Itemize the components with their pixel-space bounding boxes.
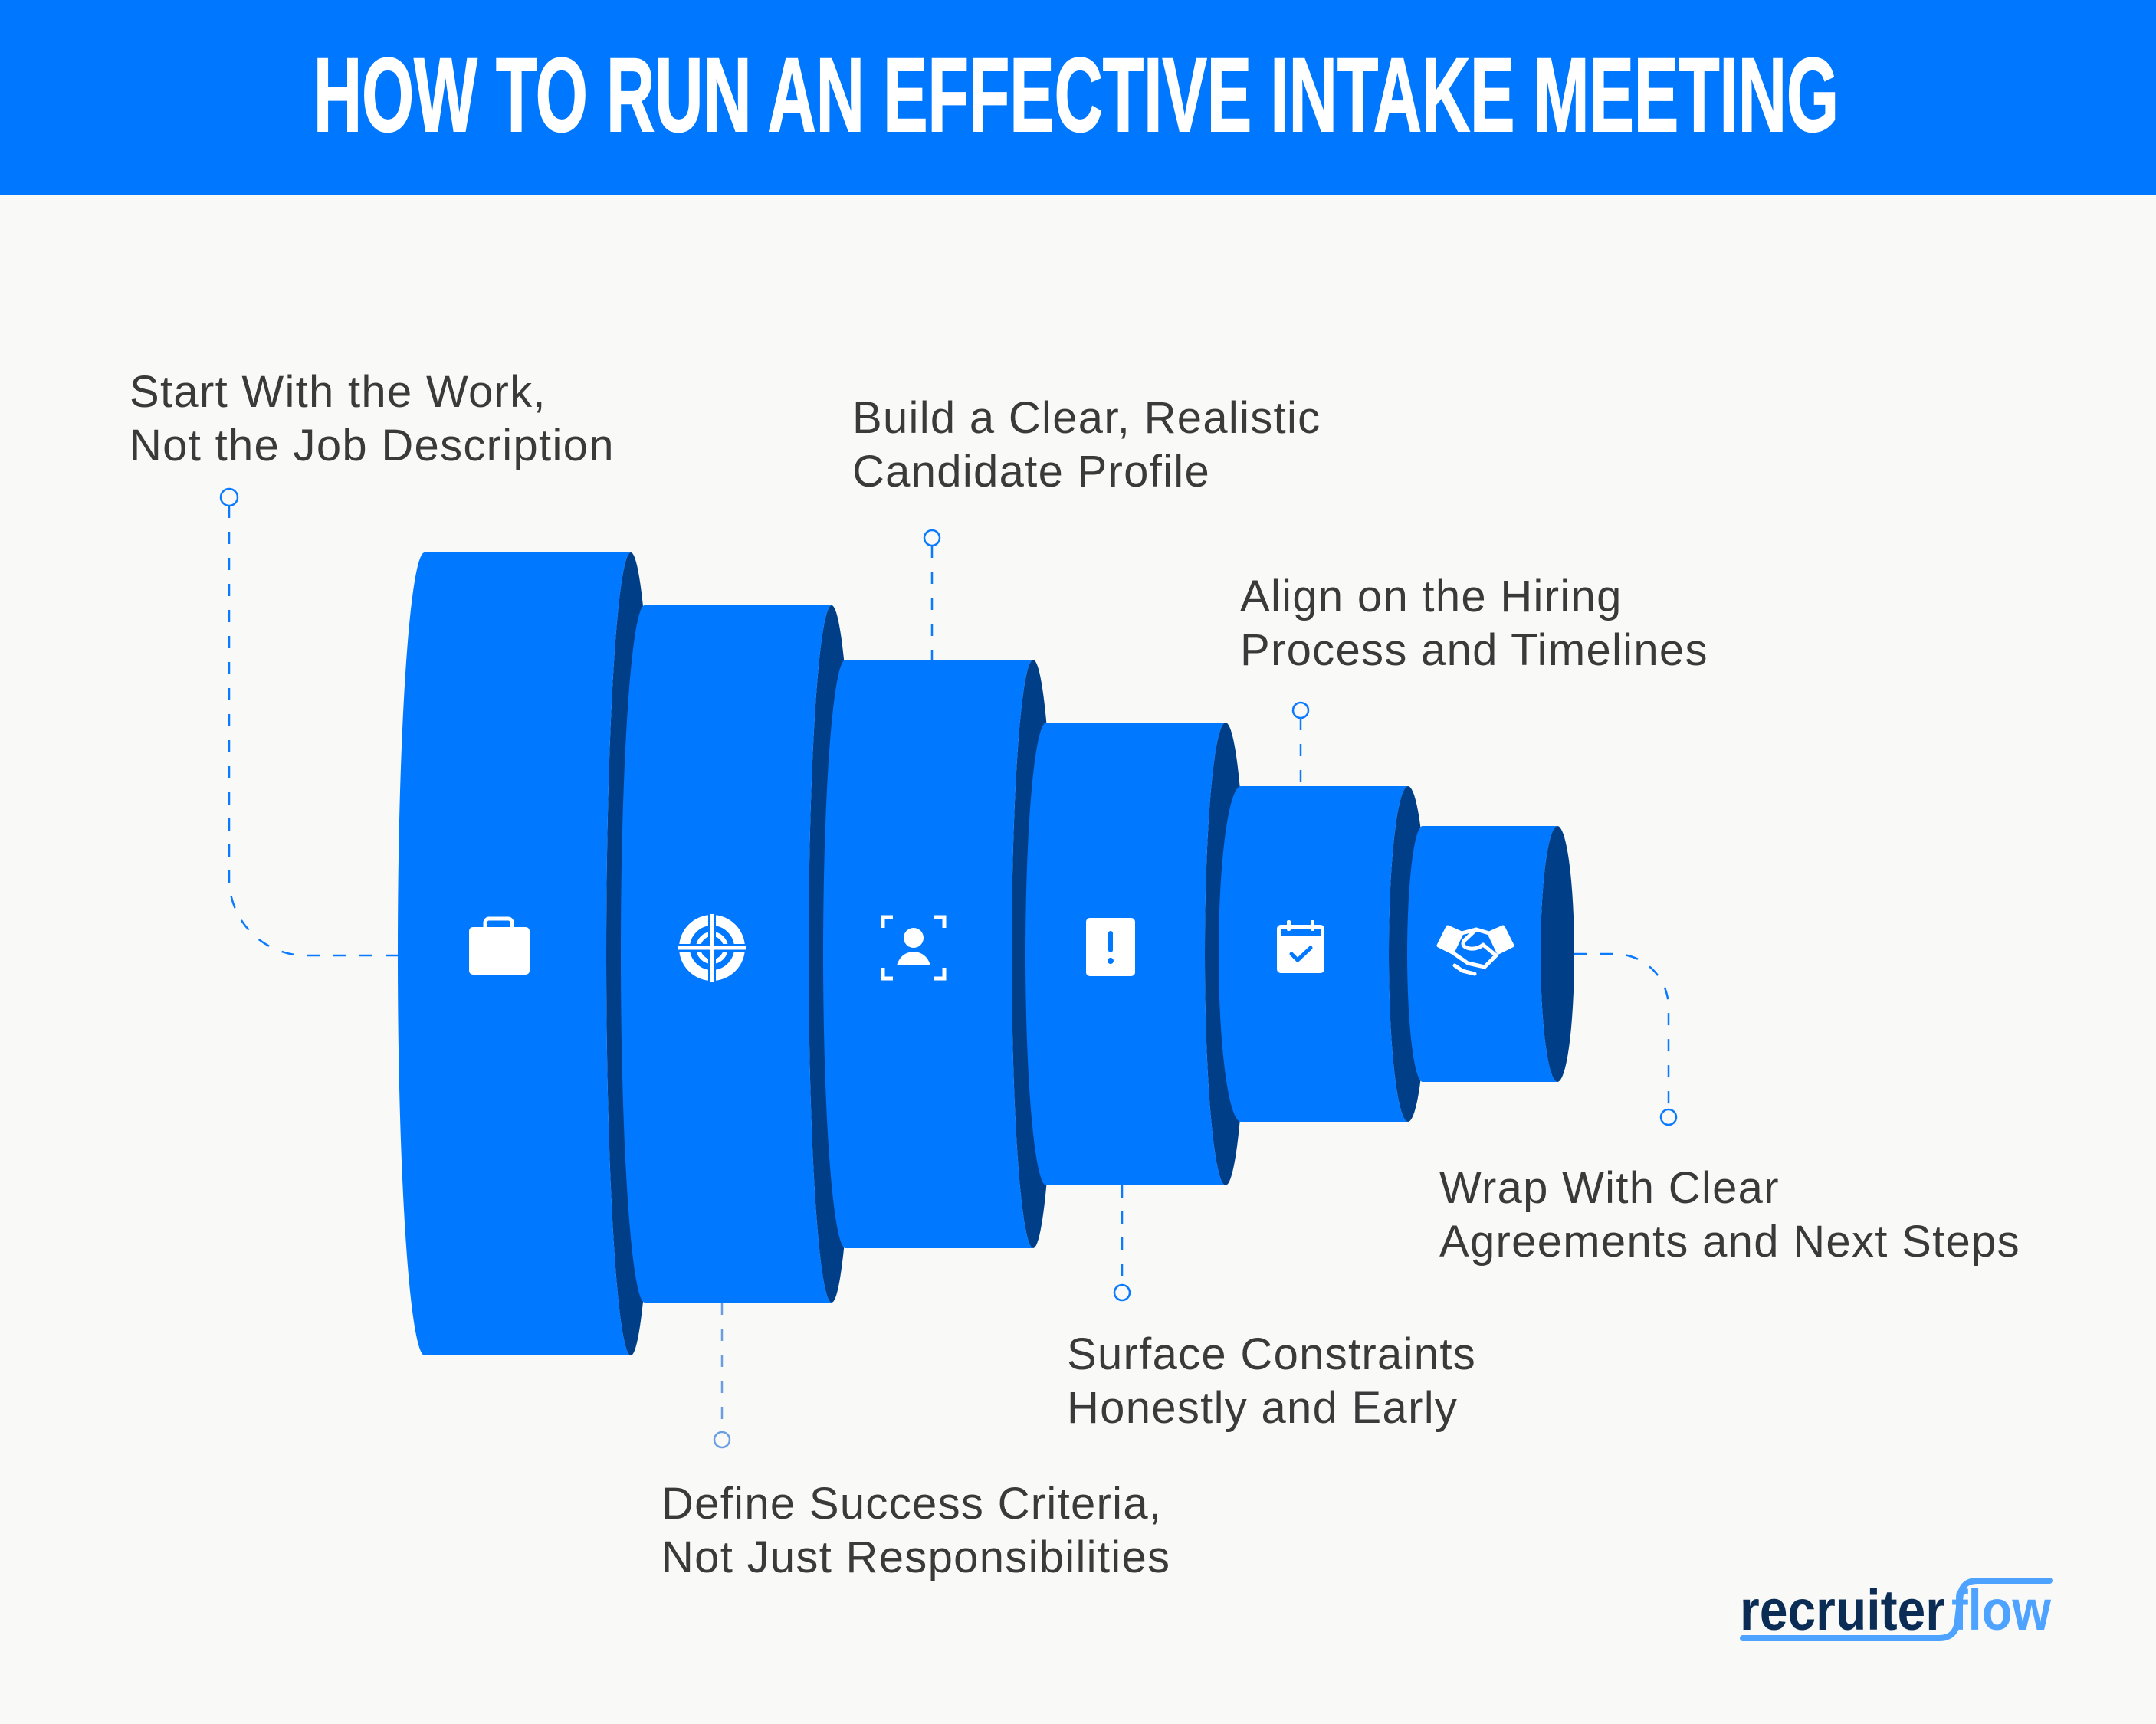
logo: recruiterflow: recruiter	[1740, 1578, 1945, 1642]
label: surface constraints	[1067, 1329, 1476, 1433]
label: define success criteria	[661, 1479, 1170, 1582]
connector: define success	[714, 1303, 730, 1447]
label: build candidate profile	[852, 393, 1321, 497]
cylinder 1	[398, 552, 655, 1355]
label: wrap with agreements	[1439, 1163, 2020, 1267]
label: start with the work	[130, 367, 615, 470]
cylinder 6	[1407, 826, 1574, 1082]
cylinder 5	[1219, 786, 1427, 1122]
connector: build profile	[924, 530, 940, 660]
icon: handshake	[1439, 927, 1512, 974]
connector: start with the work	[221, 489, 399, 955]
cylinder 2	[621, 605, 855, 1303]
label: align on hiring process	[1240, 572, 1708, 675]
icon: briefcase	[469, 919, 530, 975]
label: build candidate profile: Candidate Profile	[852, 447, 1210, 497]
label: align on hiring process: Process and Timelines	[1240, 625, 1708, 675]
label: build candidate profile: Build a Clear, Realistic	[852, 393, 1321, 443]
icon: target	[678, 914, 746, 982]
label: define success criteria: Not Just Responsibilities	[661, 1532, 1170, 1582]
logo: recruiterflow: flow	[1951, 1578, 2051, 1642]
label: define success criteria: Define Success Criteria,	[661, 1479, 1162, 1529]
label: surface constraints: Surface Constraints	[1067, 1329, 1476, 1379]
cylinder 4	[1025, 723, 1246, 1185]
icon: alert	[1086, 918, 1135, 976]
cylinder 3	[823, 660, 1055, 1248]
label: wrap with agreements: Wrap With Clear	[1439, 1163, 1780, 1213]
label: align on hiring process: Align on the Hiring	[1240, 572, 1623, 621]
label: wrap with agreements: Agreements and Next Steps	[1439, 1217, 2020, 1267]
icon: calendar	[1277, 920, 1324, 973]
header banner	[0, 0, 2156, 195]
label: start with the work: Start With the Work,	[130, 367, 546, 417]
label: surface constraints: Honestly and Early	[1067, 1383, 1458, 1433]
connector: surface constraints	[1114, 1185, 1130, 1300]
label: start with the work: Not the Job Description	[130, 421, 615, 470]
icon: person focus	[883, 917, 944, 978]
connector: align on process	[1293, 703, 1308, 787]
connector: wrap with agreements	[1574, 954, 1676, 1125]
